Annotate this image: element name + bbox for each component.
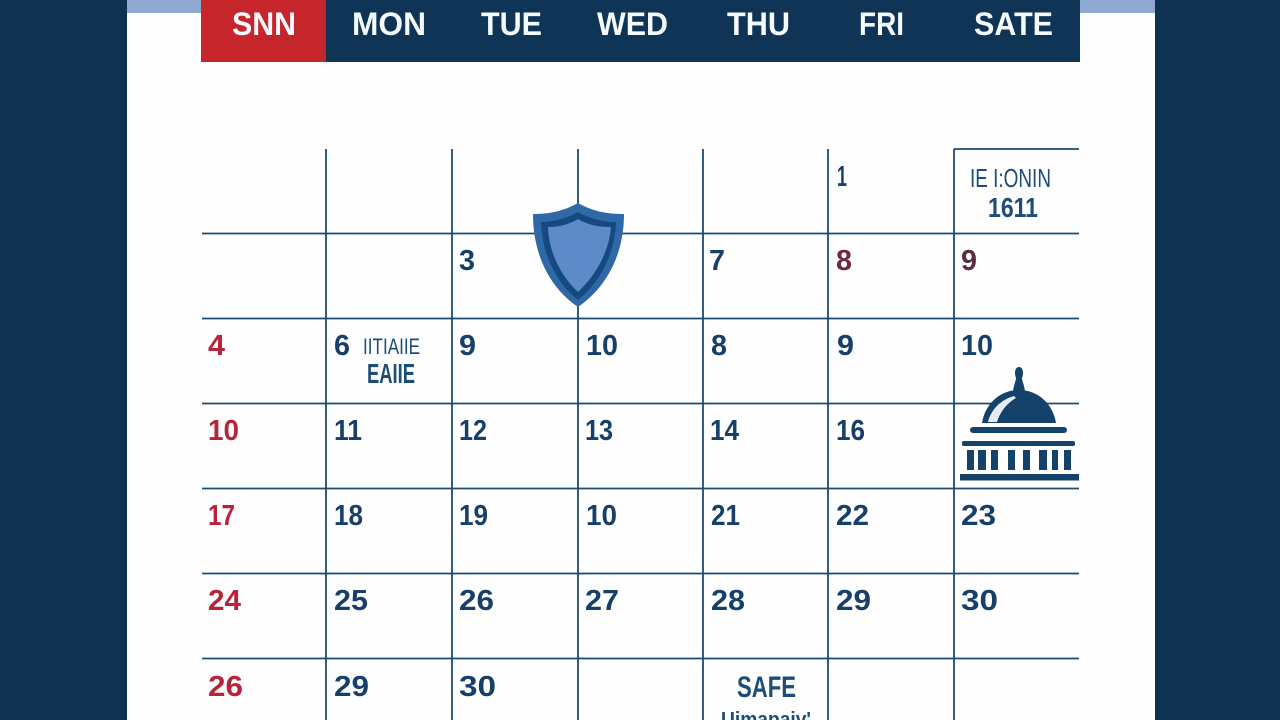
header bar bbox=[201, 0, 1080, 62]
weekday labels bbox=[232, 6, 1053, 42]
sunday cell bbox=[201, 0, 326, 62]
row 5 dates bbox=[208, 500, 996, 532]
row 6 dates: 30 bbox=[961, 585, 998, 617]
row 5 dates: 10 bbox=[586, 500, 617, 532]
row 4 dates: 16 bbox=[836, 415, 865, 447]
calendar grid bbox=[202, 149, 1079, 720]
columns bbox=[967, 450, 1071, 470]
row 3 dates: 4 bbox=[208, 330, 225, 362]
row 6 dates: 25 bbox=[334, 585, 368, 617]
note: safe: SAFE bbox=[737, 671, 796, 704]
weekday labels: SATE bbox=[974, 6, 1053, 42]
row 2 dates bbox=[459, 245, 977, 277]
row 6 dates bbox=[208, 585, 998, 617]
row 6 dates: 26 bbox=[459, 585, 494, 617]
row 1 dates: 1 bbox=[837, 161, 847, 193]
row 7 dates bbox=[208, 671, 811, 720]
note: monday cell: IITIAIIE bbox=[363, 334, 420, 359]
row 4 dates: 14 bbox=[710, 415, 739, 447]
row 2 dates: 7 bbox=[709, 245, 725, 277]
note: top right cell: 1611 bbox=[988, 192, 1038, 223]
row 5 dates: 21 bbox=[711, 500, 740, 532]
row 2 dates: 9 bbox=[961, 245, 977, 277]
row 5 dates: 18 bbox=[334, 500, 363, 532]
row 1 dates bbox=[837, 161, 1051, 223]
note: top right cell bbox=[970, 163, 1051, 223]
weekday labels: TUE bbox=[481, 6, 542, 42]
row 3 dates: 8 bbox=[711, 330, 727, 362]
row 3 dates: 6 bbox=[334, 330, 350, 362]
icon: shield bbox=[533, 203, 624, 307]
row 3 dates bbox=[208, 330, 993, 389]
dome bbox=[982, 390, 1056, 423]
row 6 dates: 28 bbox=[711, 585, 745, 617]
row 4 dates bbox=[208, 415, 865, 447]
row 3 dates: 9 bbox=[837, 330, 854, 362]
spire bbox=[1013, 367, 1025, 391]
icon: capitol building bbox=[960, 367, 1079, 480]
row 4 dates: 11 bbox=[334, 415, 362, 447]
row 3 dates: 10 bbox=[961, 330, 993, 362]
row 3 dates: 10 bbox=[586, 330, 618, 362]
row 3 dates: 9 bbox=[459, 330, 476, 362]
row 4 dates: 10 bbox=[208, 415, 239, 447]
row 4 dates: 13 bbox=[585, 415, 613, 447]
dome highlight bbox=[988, 396, 1016, 422]
row 6 dates: 29 bbox=[836, 585, 871, 617]
row 5 dates: 19 bbox=[459, 500, 488, 532]
note: monday cell bbox=[363, 334, 420, 389]
row 7 dates: 30 bbox=[459, 671, 496, 703]
row 5 dates: 23 bbox=[961, 500, 996, 532]
base bbox=[960, 474, 1079, 480]
row 6 dates: 24 bbox=[208, 585, 241, 617]
weekday header bbox=[201, 0, 1080, 62]
row 4 dates: 12 bbox=[459, 415, 487, 447]
row 5 dates: 17 bbox=[208, 500, 235, 532]
note: safe bbox=[721, 671, 811, 720]
row 5 dates: 22 bbox=[836, 500, 869, 532]
weekday labels: MON bbox=[352, 6, 426, 42]
weekday labels: FRI bbox=[859, 6, 904, 42]
row 7 dates: 29 bbox=[334, 671, 369, 703]
weekday labels: SNN bbox=[232, 6, 296, 42]
row 7 dates: 26 bbox=[208, 671, 243, 703]
lower cornice bbox=[962, 441, 1075, 446]
row 2 dates: 3 bbox=[459, 245, 475, 277]
upper cornice bbox=[970, 427, 1067, 433]
weekday labels: WED bbox=[597, 6, 668, 42]
note: monday cell: EAIIE bbox=[367, 358, 415, 389]
weekday labels: THU bbox=[727, 6, 790, 42]
top binding strip bbox=[127, 0, 1155, 13]
row 2 dates: 8 bbox=[836, 245, 852, 277]
row 6 dates: 27 bbox=[585, 585, 619, 617]
note: top right cell: IE I:ONIN bbox=[970, 163, 1051, 193]
